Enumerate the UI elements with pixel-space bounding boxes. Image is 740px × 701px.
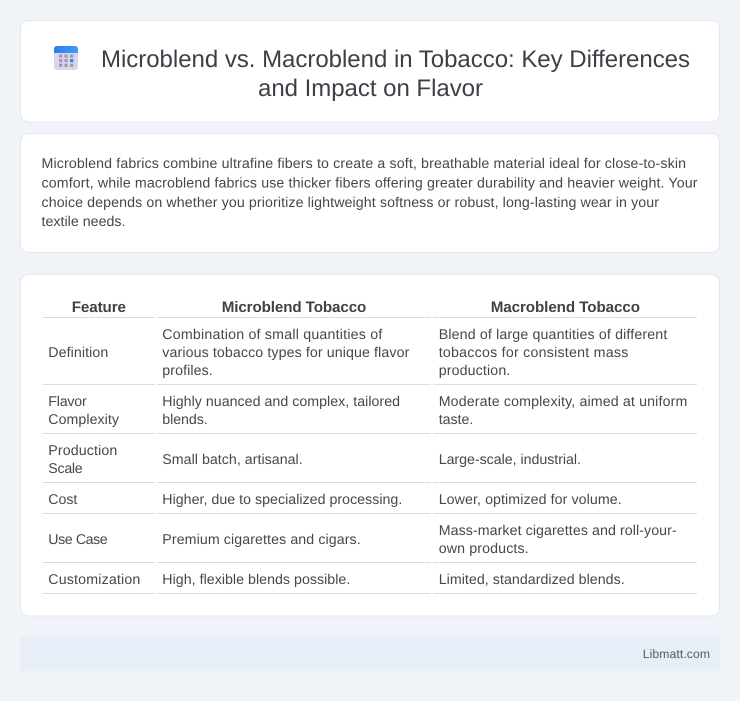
row: flavor complexity: Highly nuanced and complex, tailored	[162, 394, 400, 410]
row: definition	[43, 327, 697, 384]
row: use case: Mass-market cigarettes and roll-your-	[439, 523, 677, 539]
row: customization: Customization	[48, 572, 140, 588]
row: flavor complexity: blends.	[162, 412, 208, 428]
row: flavor complexity: Moderate complexity, aimed at uniform	[439, 394, 687, 410]
row: flavor complexity: Flavor	[48, 394, 87, 410]
table header row: Feature	[72, 299, 126, 316]
row: customization: Limited, standardized blends.	[439, 572, 625, 588]
summary text: choice depends on whether you prioritize lightweight softness or robust, long-lasting wear in your	[42, 195, 659, 211]
row: definition: Blend of large quantities of different	[439, 327, 667, 343]
row: definition: production.	[439, 363, 510, 379]
summary text	[42, 156, 698, 230]
title: Microblend vs. Macroblend in Tobacco: Key Differences	[101, 46, 690, 73]
row: production scale: Production	[48, 443, 117, 459]
row: flavor complexity: Complexity	[48, 412, 120, 428]
row: production scale: Small batch, artisanal.	[162, 452, 303, 468]
row: production scale: Scale	[48, 461, 83, 477]
panel: title card	[20, 20, 720, 122]
row: use case: Use Case	[48, 532, 108, 548]
table header row: Microblend Tobacco	[222, 299, 366, 316]
icon: calendar	[54, 46, 78, 70]
footer	[20, 637, 720, 671]
summary text: Microblend fabrics combine ultrafine fibers to create a soft, breathable material ideal for close-to-skin	[42, 156, 686, 172]
title	[101, 46, 690, 102]
row: use case: own products.	[439, 541, 529, 557]
row: use case: Premium cigarettes and cigars.	[162, 532, 361, 548]
row: definition: tobaccos for consistent mass	[439, 345, 628, 361]
row: cost	[43, 492, 697, 514]
row: cost: Higher, due to specialized processing.	[162, 492, 402, 508]
panel: comparison table	[20, 274, 720, 616]
row: cost: Lower, optimized for volume.	[439, 492, 622, 508]
row: flavor complexity	[43, 394, 697, 434]
footer credit: Libmatt.com	[643, 647, 710, 661]
summary text: comfort, while macroblend fabrics use thicker fibers offering greater durability and heavier weight. Your	[42, 176, 698, 192]
row: customization: High, flexible blends possible.	[162, 572, 350, 588]
row: cost: Cost	[48, 492, 77, 508]
row: definition: various tobacco types for unique flavor	[162, 345, 410, 361]
title: and Impact on Flavor	[258, 75, 483, 102]
row: definition: Definition	[48, 345, 108, 361]
row: definition: Combination of small quantities of	[162, 327, 382, 343]
row: production scale: Large-scale, industrial.	[439, 452, 581, 468]
row: definition: profiles.	[162, 363, 213, 379]
table header row	[43, 299, 697, 318]
summary text: textile needs.	[42, 214, 126, 230]
table header row: Macroblend Tobacco	[491, 299, 640, 316]
row: production scale	[43, 443, 697, 482]
row: use case	[43, 523, 697, 562]
panel: summary paragraph	[20, 134, 720, 252]
row: flavor complexity: taste.	[439, 412, 473, 428]
row: customization	[43, 572, 697, 594]
